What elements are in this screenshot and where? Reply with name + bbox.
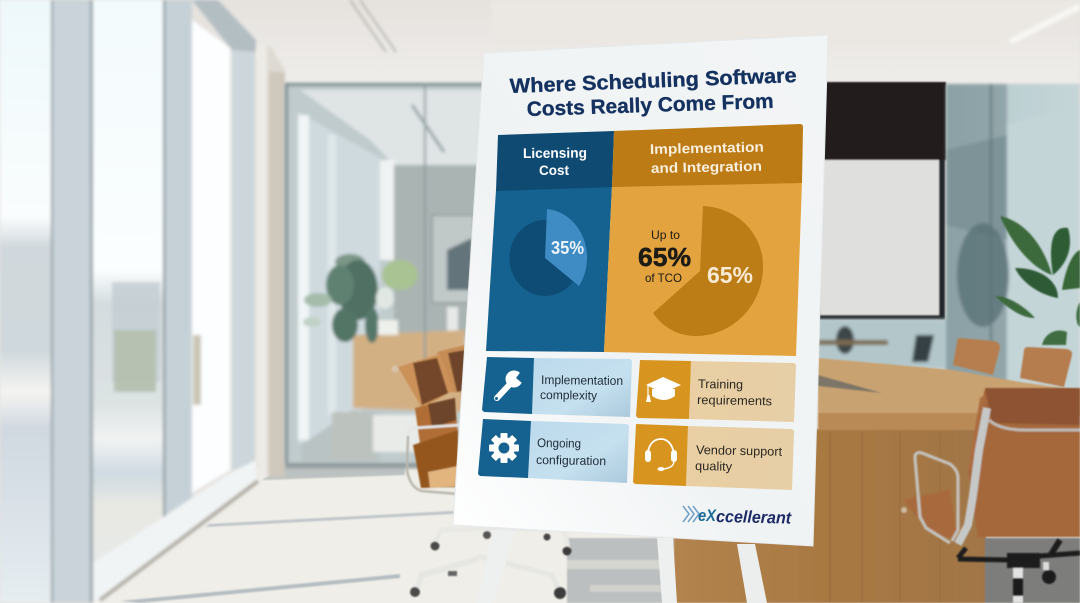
label: quality (695, 459, 733, 474)
left windows (0, 0, 258, 603)
callout: up to 65% of TCO: 65% (638, 242, 691, 272)
label (536, 436, 606, 468)
callout: up to 65% of TCO: Up to (651, 228, 680, 242)
icon: headset (645, 439, 677, 471)
pie chart: 65%: 65% (707, 262, 753, 288)
licensing heading: Licensing (523, 145, 587, 161)
implementation header (612, 124, 803, 187)
tile: vendor support quality (633, 424, 794, 490)
glass plant (303, 254, 418, 343)
tile: training requirements (636, 360, 796, 422)
label: requirements (697, 393, 772, 408)
chair base under poster (410, 528, 572, 599)
callout: up to 65% of TCO (638, 228, 691, 285)
glass meeting room (285, 83, 485, 468)
label: complexity (540, 388, 598, 403)
icon: graduation cap (646, 377, 681, 402)
easel legs (477, 530, 767, 603)
label (540, 373, 623, 403)
logo: eXcellerant: eX (698, 506, 717, 525)
ceiling (200, 0, 1080, 84)
panel: implementation and integration (604, 124, 803, 356)
panel: licensing cost (486, 131, 614, 352)
label: Ongoing (537, 436, 581, 451)
label: Implementation (541, 373, 623, 388)
pie chart: 35% (510, 209, 587, 296)
poster (453, 35, 828, 546)
callout: up to 65% of TCO: of TCO (645, 271, 682, 285)
pie chart: 65% (653, 206, 763, 336)
label: Vendor support (696, 443, 783, 459)
rear chair (437, 345, 465, 392)
implementation heading (650, 139, 764, 176)
pie chart: 35%: 35% (551, 238, 584, 258)
licensing heading: Cost (539, 162, 569, 178)
potted plant (995, 216, 1080, 345)
label: Training (698, 377, 743, 392)
title: Costs Really Come From (526, 90, 774, 121)
licensing heading (523, 145, 587, 178)
icon: wrench (495, 366, 529, 400)
implementation body (604, 181, 802, 356)
title (509, 64, 797, 121)
logo: eXcellerant (683, 506, 793, 528)
implementation heading: Implementation (650, 139, 764, 157)
implementation heading: and Integration (651, 158, 762, 176)
front leather chair (901, 388, 1080, 603)
tile: implementation complexity (482, 357, 632, 417)
label (697, 377, 772, 408)
licensing body (486, 186, 612, 352)
right glass wall (818, 84, 1080, 390)
conference screen (818, 82, 946, 320)
licensing header (496, 131, 614, 191)
label (695, 443, 783, 474)
tile: ongoing configuration (478, 419, 629, 483)
label: configuration (536, 453, 606, 468)
poster board (453, 35, 828, 546)
wall pier (257, 45, 285, 477)
left leather chairs (392, 345, 465, 494)
floor (90, 467, 680, 603)
front chair back (398, 354, 454, 408)
icon: gear (489, 433, 519, 463)
back chairs (953, 338, 1072, 387)
logo: eXcellerant: ccellerant (716, 507, 793, 528)
conference table (674, 358, 1080, 603)
title: Where Scheduling Software (509, 64, 797, 98)
